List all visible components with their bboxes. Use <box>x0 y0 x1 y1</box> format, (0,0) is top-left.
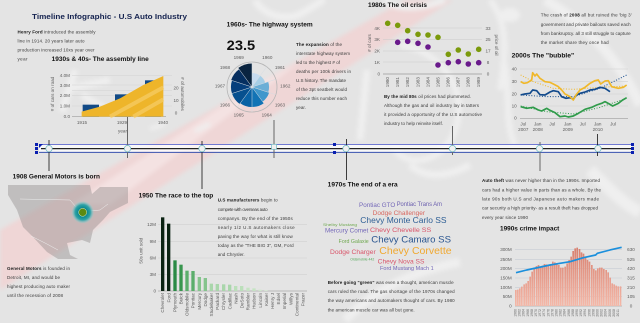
chart: 1950s unit sales bars: Plymouth <box>172 293 177 312</box>
text: crash of 2008 <box>541 12 632 45</box>
chart: 1950s unit sales bars: Frazer <box>300 293 306 306</box>
chart: crime bars and line: 100M <box>500 285 512 290</box>
text: crash of 2008: government and private bailouts saved each <box>541 22 631 27</box>
chart: crime bars and line <box>500 247 635 317</box>
chart: 1950s unit sales bars <box>138 217 307 316</box>
chart: oil crisis scatter: 1986 <box>446 77 451 87</box>
chart: 2000s line chart: Jul <box>549 122 555 126</box>
text: oil crisis <box>384 94 482 126</box>
chart: crime bars and line: 1990 <box>575 309 579 317</box>
text: oil crisis: Although the gas and oil industry lay in tatters <box>384 103 480 108</box>
chart: oil crisis scatter: 0 <box>377 72 380 76</box>
chart: polar area deaths: 1965 <box>234 112 244 118</box>
chart: polar area deaths: 1963 <box>275 102 286 108</box>
chart: crime bars and line: 2008 <box>612 309 616 317</box>
word cloud: muscle cars: Ford Galaxie <box>339 239 369 245</box>
chart: assembly line bars and area: 3.0M <box>60 83 70 88</box>
chart: 2000s line chart: 0 <box>514 116 517 120</box>
chart: 1950s unit sales bars: 50s unit sold <box>138 237 144 264</box>
chart: 1950s unit sales bars: 6M <box>150 256 156 260</box>
chart: oil crisis scatter: price of oil <box>494 35 499 55</box>
chart: oil crisis scatter: 2K <box>374 48 381 54</box>
chart: crime bars and line: 2006 <box>608 309 612 317</box>
text: highway system: reduce this number each <box>296 96 347 101</box>
text: highway system: of the 3pt seatbelt would <box>296 87 347 92</box>
chart: crime bars and line: 2011 <box>616 309 620 317</box>
chart: polar area deaths: 1964 <box>262 112 272 118</box>
text: end of an era: the american muscle car was all but gone. <box>328 308 415 312</box>
chart: crime bars and line: 210 <box>627 285 635 290</box>
chart: crime bars and line: 1996 <box>587 309 591 317</box>
chart: assembly line bars and area: # of cars on road <box>50 76 55 111</box>
chart: crime bars and line: 1982 <box>559 309 563 317</box>
chart: 1950s unit sales bars: Henry J <box>270 293 275 309</box>
chart: 2000s line chart: Jul <box>520 122 526 126</box>
chart: 1950s unit sales bars: Pontiac <box>191 292 196 308</box>
chart: 1950s unit sales bars: 9M <box>150 239 156 244</box>
text: General Motors: Detroit, MI, and would be <box>7 275 60 280</box>
chart: assembly line bars and area: # of automobiles <box>180 77 185 112</box>
chart: 1950s unit sales bars: Chevrolet <box>160 292 165 313</box>
text: highway system <box>296 42 351 110</box>
text: highway system: interstate highway system <box>296 51 350 56</box>
word cloud: muscle cars: Chevy Chevelle SS <box>370 227 432 234</box>
chart: 2000s line chart <box>512 66 628 132</box>
chart: crime bars and line: 630 <box>627 247 635 252</box>
chart: crime bars and line: 1962 <box>518 309 522 317</box>
chart: 1950s unit sales bars: Lincoln <box>258 293 263 308</box>
chart: crime bars and line: 315 <box>627 276 635 280</box>
text: race to the top: paving the way for what is still know <box>218 234 293 239</box>
chart: oil crisis scatter: # of cars <box>367 33 372 52</box>
chart: polar area deaths: 1966 <box>220 102 231 108</box>
word cloud: muscle cars: Ford Mustang Mach 1 <box>380 266 434 272</box>
chart: oil crisis scatter: 1982 <box>405 77 410 87</box>
chart: 1950s unit sales bars: Studebaker <box>209 293 214 316</box>
text: race to the top: today as the "THE BIG 3", GM, Ford <box>218 243 294 248</box>
chart: crime bars and line: 2004 <box>604 309 608 317</box>
heading: General Motors: 1908 General Motors is born <box>13 173 100 180</box>
word cloud: muscle cars: Chevy Camaro SS <box>371 234 451 244</box>
word cloud: muscle cars: Chevy Monte Carlo SS <box>360 216 447 225</box>
chart: 1950s unit sales bars: Kaiser <box>264 293 269 306</box>
chart: crime bars and line: 0 <box>630 304 633 308</box>
chart: crime bars and line: 2000 <box>596 309 600 317</box>
heading: oil crisis: 1980s The oil crisis <box>368 2 428 9</box>
text: crash of 2008: the market share they once had <box>541 40 609 45</box>
text: end of an era: the way americans and automakers thought of cars. By 1980 <box>328 298 455 303</box>
chart: 2000s line chart: 2008 <box>533 127 543 132</box>
chart: 1950s unit sales bars: 3M <box>150 272 156 277</box>
chart: assembly line bars and area: 1929 <box>117 120 128 125</box>
chart: crime bars and line: 1994 <box>583 309 587 317</box>
text: race to the top: U.S manufacturers begin to <box>218 198 278 202</box>
chart: crime bars and line: 1992 <box>579 309 583 317</box>
text: auto theft: Auto theft was never higher than in the 1990s. Imported <box>482 178 600 183</box>
chart: 1950s unit sales bars: Mercury <box>197 292 202 310</box>
word cloud: muscle cars: Oldsmobile 442 <box>350 258 374 262</box>
chart: oil crisis scatter: 1983 <box>415 77 420 87</box>
chart: polar area deaths: 1962 <box>280 84 291 88</box>
chart: 1950s unit sales bars: Nash <box>233 293 238 304</box>
text: race to the top <box>218 198 295 257</box>
chart: crime bars and line: 1998 <box>591 309 595 317</box>
chart: oil crisis scatter: 1987 <box>456 77 461 87</box>
text: crash of 2008: from bankruptcy. all 3 still struggle to capture <box>541 31 631 36</box>
chart: oil crisis scatter: 1981 <box>395 77 400 87</box>
text: Henry Ford intro: Henry Ford introduced the assembly <box>18 30 96 34</box>
heading: highway system: 1960s- The highway system <box>227 22 313 29</box>
chart: oil crisis scatter: 3K <box>374 37 381 42</box>
word cloud: muscle cars: Pontiac Trans Am <box>397 202 442 208</box>
word cloud: muscle cars: Chevy Nova SS <box>378 258 425 265</box>
text: General Motors: General Motors is founded in <box>7 266 70 271</box>
text: end of an era <box>328 280 455 312</box>
chart: assembly line bars and area <box>50 73 185 134</box>
chart: crime bars and line: 1986 <box>567 309 571 317</box>
chart: polar area deaths: 1968 <box>220 65 231 70</box>
chart: assembly line bars and area: 0 <box>175 110 178 116</box>
word cloud: muscle cars: Mercury Comet <box>325 228 369 234</box>
word cloud: muscle cars: Dodge Charger <box>330 249 377 256</box>
chart: crime bars and line: 420 <box>627 266 635 271</box>
chart: assembly line bars and area: 10 <box>173 98 179 103</box>
chart: crime bars and line: 1978 <box>550 309 554 317</box>
chart: oil crisis scatter: 1K <box>374 60 381 65</box>
text: highway system: U.S history. The mandate <box>296 78 346 83</box>
text: Henry Ford intro: production increased 10xs year over <box>18 48 95 52</box>
chart: 1950s unit sales bars: Continental <box>294 293 299 316</box>
text: race to the top: nearly 1/2 U.S automakers close <box>218 225 295 230</box>
text: race to the top: companys. By the end of the 1950s <box>218 216 293 221</box>
title: Timeline Infographic - U.S Auto Industry <box>32 12 188 21</box>
chart: 1950s unit sales bars: Rambler <box>246 293 251 310</box>
chart: oil crisis scatter: 1980 <box>385 77 390 87</box>
chart: assembly line bars and area: 2.0M <box>60 93 70 98</box>
text: General Motors <box>7 266 70 298</box>
chart: oil crisis scatter: 1988 <box>466 77 471 87</box>
chart: assembly line bars and area: 1.0M <box>60 104 70 108</box>
chart: oil crisis scatter: 17 <box>485 48 491 54</box>
text: auto theft <box>482 178 601 220</box>
chart: crime bars and line: 0 <box>509 304 512 308</box>
chart: polar area deaths <box>215 55 291 118</box>
text: auto theft: car security a high priority- as a result theft has dropped <box>482 206 598 210</box>
text: race to the top: and Chrysler. <box>218 252 245 257</box>
word cloud: muscle cars: Pontiac GTO <box>359 203 396 209</box>
chart: 2000s line chart: Jan <box>594 122 602 126</box>
chart: crime bars and line: 1966 <box>526 309 530 317</box>
chart: 2000s line chart: 2010 <box>593 127 603 132</box>
chart: assembly line bars and area: 0.0 <box>64 114 70 119</box>
text: end of an era: cars ruled the road. The gas shortage of the 1970s changed <box>328 289 455 294</box>
chart: crime bars and line: 200M <box>500 266 512 271</box>
chart: oil crisis scatter: 1989 <box>476 77 481 87</box>
chart: crime bars and line: 2002 <box>600 309 604 317</box>
chart: crime bars and line: 1964 <box>522 309 526 317</box>
chart: 1950s unit sales bars: Ford <box>166 293 171 302</box>
text: Henry Ford intro <box>18 30 96 62</box>
text: auto theft: late 90s both U.S and Japanese auto makers made <box>482 196 599 202</box>
text: highway system: The expansion of the <box>296 42 342 47</box>
text: auto theft: cars had a higher value in parts than as a whole. By the <box>482 188 601 192</box>
word cloud: muscle cars <box>323 202 452 272</box>
chart: crime bars and line: 1968 <box>530 309 534 317</box>
text: crash of 2008: The crash of 2008 all but ruined the 'big 3' <box>541 12 632 18</box>
chart: oil crisis scatter: 8 <box>487 60 490 65</box>
chart: assembly line bars and area: 4.0M <box>60 73 70 78</box>
chart: 1950s unit sales bars: DeSoto <box>240 293 244 308</box>
chart: crime bars and line: 1984 <box>563 309 567 317</box>
chart: crime bars and line: 1974 <box>542 309 546 317</box>
chart: oil crisis scatter: 1985 <box>435 77 440 87</box>
word cloud: muscle cars: Shelby Mustang <box>323 223 357 227</box>
chart: crime bars and line: 50M <box>503 294 512 299</box>
word cloud: muscle cars: Chevy Corvette <box>379 246 452 257</box>
text: Henry Ford intro: line in 1914. 20 years later auto <box>18 38 85 44</box>
chart: 2000s line chart: Jul <box>580 122 586 126</box>
chart: crime bars and line: 1988 <box>571 309 575 317</box>
chart: polar area deaths: 1967 <box>215 84 226 88</box>
text: auto theft: every year since 1990 <box>482 215 528 220</box>
chart: 2000s line chart: 30 <box>512 79 517 84</box>
chart: 1950s unit sales bars: 12M <box>147 222 156 227</box>
chart: oil crisis scatter: 33 <box>485 26 491 31</box>
chart: 2000s line chart: Jan <box>564 122 572 126</box>
chart: polar area deaths: 1960 <box>262 55 273 60</box>
text: highway system: deaths per 100k drivers in <box>296 69 351 74</box>
chart: oil crisis scatter: 4K <box>374 26 381 31</box>
big number: 23.5 <box>227 38 256 53</box>
chart: 1950s unit sales bars: Cadillac <box>227 292 232 309</box>
chart: polar area deaths: 1961 <box>275 65 286 70</box>
chart: 1950s unit sales bars: Edsel <box>276 293 281 304</box>
chart: 2000s line chart: 40 <box>512 66 517 72</box>
chart: 1950s unit sales bars: Oldsmobile <box>185 293 190 316</box>
chart: assembly line bars and area: 20 <box>173 86 179 90</box>
text: oil crisis: it provided a opportunity of the U.S automotive <box>384 112 482 117</box>
word cloud: muscle cars: Dodge Challenger <box>373 211 425 217</box>
text: highway system: led to the highest # of <box>296 60 341 65</box>
heading: end of an era: 1970s The end of a era <box>328 181 398 188</box>
timeline <box>35 117 634 189</box>
chart: crime bars and line: 1980 <box>554 309 558 317</box>
chart: 2000s line chart: 2007 <box>518 127 529 132</box>
chart: crime bars and line: 105 <box>627 294 635 299</box>
chart: assembly line bars and area: year <box>118 128 127 134</box>
chart: crime bars and line: 150M <box>500 276 512 280</box>
chart: oil crisis scatter <box>367 20 499 87</box>
text: highway system: year. <box>296 105 306 110</box>
chart: 1950s unit sales bars: Dodge <box>203 293 208 307</box>
chart: 1950s unit sales bars: Chrysler <box>221 293 226 310</box>
chart: 1950s unit sales bars: Willys <box>288 292 293 305</box>
chart: crime bars and line: 1976 <box>546 309 550 317</box>
chart: assembly line bars and area: 1915 <box>77 120 88 125</box>
chart: 2000s line chart: Jan <box>534 122 542 126</box>
text: General Motors: highest producing auto maker <box>7 284 70 289</box>
chart: polar area deaths: 1969 <box>234 55 244 60</box>
chart: 2000s line chart: 20 <box>512 92 517 96</box>
chart: crime bars and line: 1972 <box>538 309 542 317</box>
chart: 1950s unit sales bars: Imperial <box>282 293 287 309</box>
chart: crime bars and line: 300M <box>500 247 512 252</box>
heading: crime impact: 1990s crime impact <box>500 225 559 232</box>
chart: 2000s line chart: Jul <box>610 122 616 126</box>
chart: crime bars and line: 1960 <box>514 309 518 317</box>
text: General Motors: until the recession of 2008 <box>7 293 63 298</box>
chart: 1950s unit sales bars: Hudson <box>252 293 257 309</box>
chart: oil crisis scatter: 1984 <box>425 77 430 87</box>
heading: assembly line: 1930s & 40s- The assembly line <box>52 56 149 63</box>
chart: assembly line bars and area: 1940 <box>158 120 169 125</box>
map: North America with Detroit marker <box>8 185 128 259</box>
chart: oil crisis scatter: 25 <box>485 37 491 42</box>
text: end of an era: Before going "green" was even a thought, american muscle <box>328 280 454 285</box>
chart: 1950s unit sales bars: Buick <box>178 292 184 304</box>
text: race to the top: compete with overseas auto <box>218 207 268 212</box>
chart: crime bars and line: 250M <box>500 257 512 262</box>
chart: 1950s unit sales bars: 0 <box>153 288 156 294</box>
text: oil crisis: industry to help reinvite itself. <box>384 121 443 126</box>
chart: crime bars and line: 1970 <box>534 309 538 317</box>
chart: 2000s line chart: 2009 <box>563 127 573 132</box>
heading: race to the top: 1950 The race to the top <box>139 193 214 200</box>
heading: bubble: 2000s The "bubble" <box>512 52 574 60</box>
chart: 2000s line chart: 10 <box>512 104 517 108</box>
chart: 1950s unit sales bars: Packard <box>215 293 220 310</box>
text: oil crisis: By the mid 80s oil prices had plummeted. <box>384 94 471 99</box>
chart: oil crisis scatter: 0 <box>487 72 490 76</box>
chart: crime bars and line: 525 <box>627 257 635 262</box>
text: Henry Ford intro: year <box>18 56 28 62</box>
